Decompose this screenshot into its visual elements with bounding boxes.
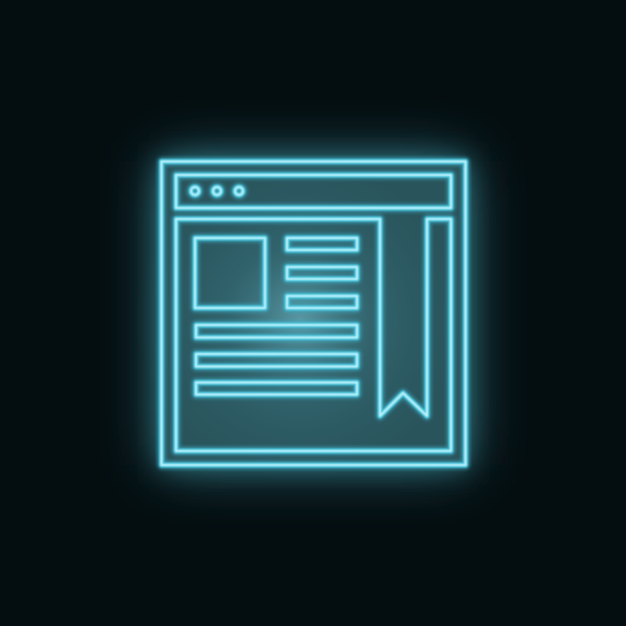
neon browser window icon xyxy=(162,162,466,465)
neon tube xyxy=(162,162,466,465)
neon halo xyxy=(162,162,466,465)
outer ambient glow xyxy=(161,161,466,465)
window fill xyxy=(161,161,466,465)
neon core xyxy=(162,162,466,465)
near edge glow xyxy=(158,158,469,468)
central light xyxy=(135,155,465,485)
